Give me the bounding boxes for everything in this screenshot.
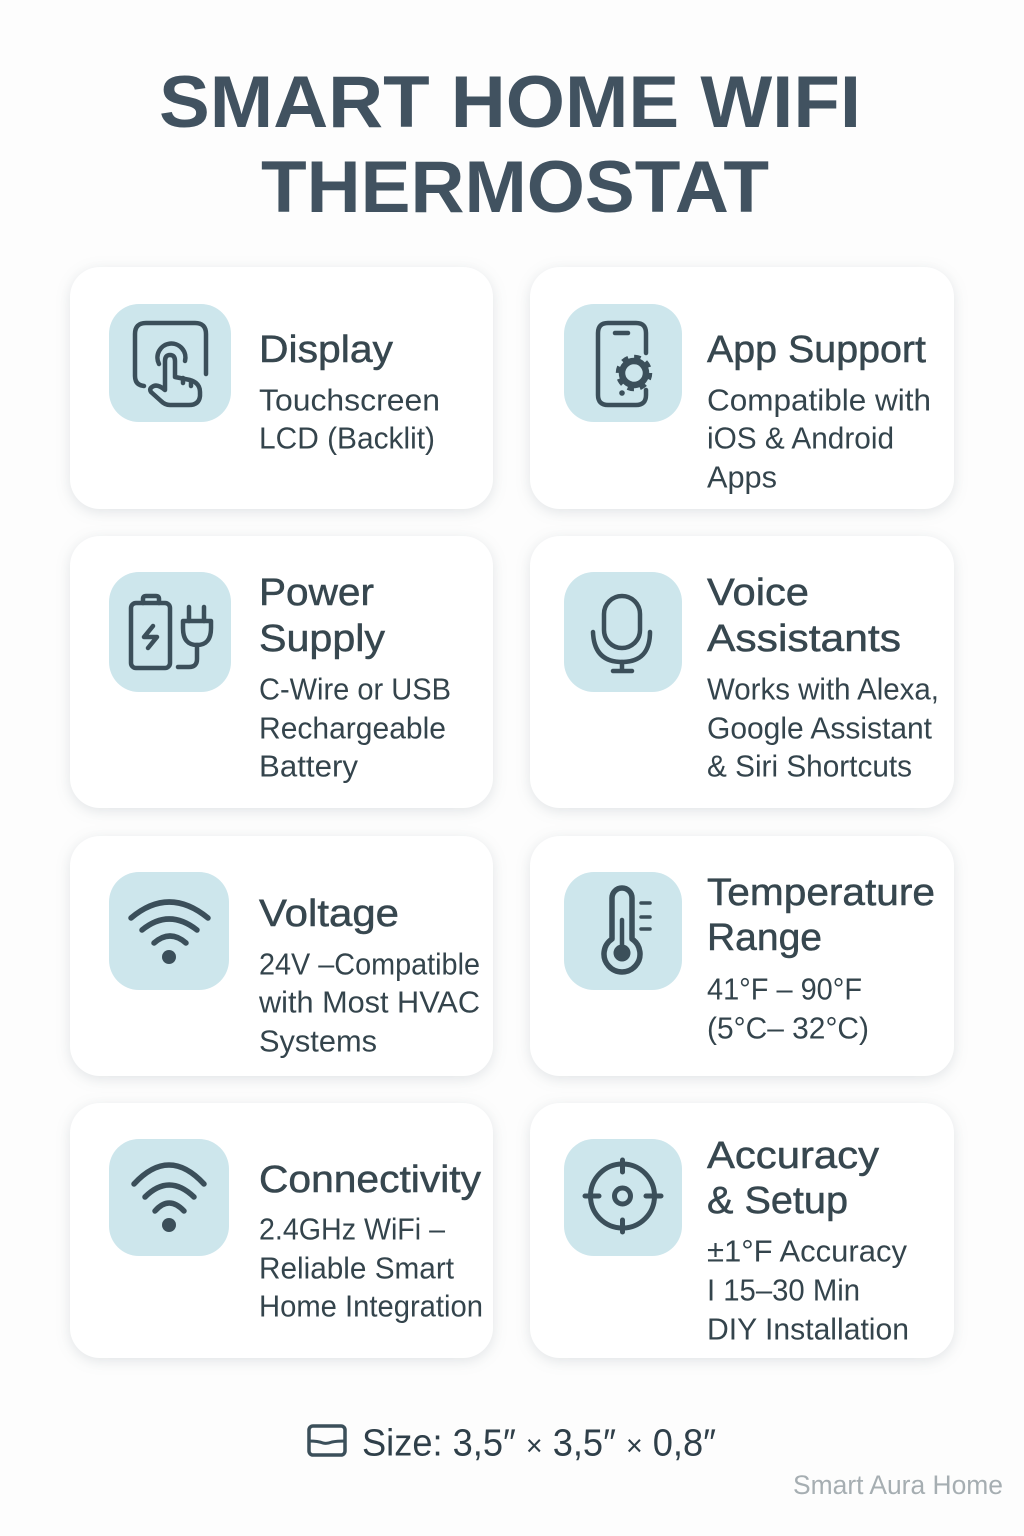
panel: power supply — [70, 536, 493, 808]
heading — [259, 572, 385, 660]
icon: microphone — [593, 596, 650, 671]
description: Google Assistant — [707, 710, 932, 745]
description: Battery — [259, 748, 358, 783]
description: with Most HVAC — [258, 984, 480, 1019]
heading — [707, 1135, 879, 1222]
description: Touchscreen — [259, 382, 440, 417]
description — [259, 1211, 483, 1323]
description — [707, 382, 931, 494]
description: Compatible with — [707, 382, 931, 417]
icon: phone with gear — [598, 323, 650, 405]
panel: connectivity — [70, 1103, 493, 1358]
panel: app support — [530, 267, 954, 509]
panel: voice assistants — [530, 536, 954, 808]
description: & Siri Shortcuts — [707, 748, 912, 783]
panel: display — [70, 267, 493, 509]
description: (5°C– 32°C) — [707, 1010, 869, 1045]
description: Home Integration — [259, 1288, 483, 1323]
description: 24V –Compatible — [259, 946, 480, 981]
description — [259, 382, 440, 455]
title: THERMOSTAT — [261, 147, 769, 228]
description: I 15–30 Min — [707, 1272, 860, 1307]
heading: Temperature — [707, 872, 935, 914]
size footer — [309, 1422, 716, 1464]
heading: Voice — [707, 572, 809, 614]
heading: & Setup — [707, 1180, 848, 1222]
description: 41°F – 90°F — [707, 971, 862, 1006]
heading: Power — [259, 572, 374, 614]
icon: touchscreen — [135, 323, 206, 405]
description: ±1°F Accuracy — [707, 1233, 907, 1268]
description — [258, 946, 480, 1058]
description: LCD (Backlit) — [259, 420, 435, 455]
heading: Accuracy — [707, 1135, 879, 1177]
panel: temperature range — [530, 836, 954, 1076]
heading: Display — [259, 329, 393, 371]
description: Systems — [259, 1023, 377, 1058]
heading: Assistants — [707, 618, 901, 660]
size text: Size: 3,5″ × 3,5″ × 0,8″ — [362, 1422, 716, 1464]
heading — [707, 872, 935, 959]
title — [159, 62, 861, 228]
icon: wifi signal — [131, 902, 208, 964]
description — [707, 971, 869, 1045]
description: Works with Alexa, — [707, 671, 939, 706]
description: Rechargeable — [259, 710, 446, 745]
icon: wifi — [134, 1165, 204, 1232]
watermark: Smart Aura Home — [793, 1470, 1003, 1500]
description: Apps — [707, 459, 777, 494]
icon: thermometer — [604, 888, 650, 972]
heading: Range — [707, 917, 822, 959]
heading — [707, 572, 901, 660]
description — [707, 1233, 909, 1346]
description: Reliable Smart — [259, 1250, 454, 1285]
description: 2.4GHz WiFi – — [259, 1211, 446, 1246]
icon: size — [309, 1426, 345, 1455]
description: iOS & Android — [707, 420, 894, 455]
description — [259, 671, 451, 783]
icon: target — [585, 1160, 661, 1232]
title: SMART HOME WIFI — [159, 62, 861, 143]
heading: Supply — [259, 618, 385, 660]
heading: App Support — [707, 329, 926, 371]
panel: accuracy and setup — [530, 1103, 954, 1358]
icon: battery and plug — [131, 596, 211, 668]
panel: voltage — [70, 836, 493, 1076]
description: C-Wire or USB — [259, 671, 451, 706]
description: DIY Installation — [707, 1311, 909, 1346]
heading: Voltage — [259, 893, 399, 935]
description — [707, 671, 939, 783]
heading: Connectivity — [259, 1159, 481, 1201]
